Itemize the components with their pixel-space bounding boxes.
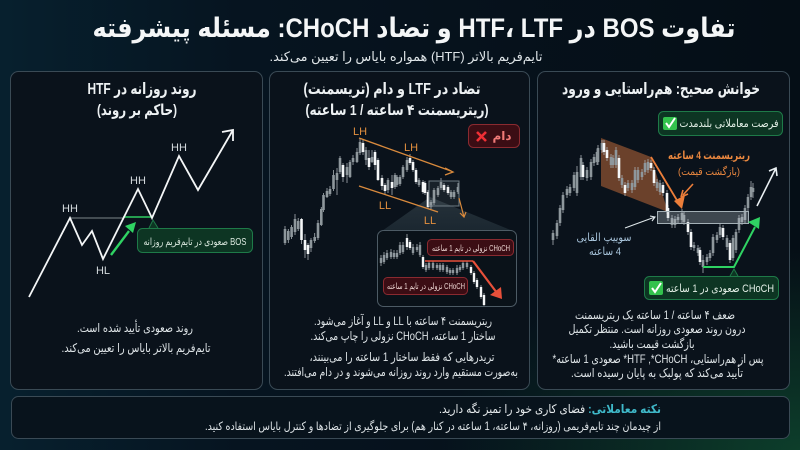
callout: bearish CHoCH lower: CHoCH نزولی در تایم 1 ساعته [387, 281, 465, 292]
panel text: ریتریسمنت ۴ ساعته با LL و LL و آغاز می‌شود. [314, 313, 492, 329]
chart: candlesticks with LH and LL: LL [379, 200, 391, 212]
panel text: روند صعودی تأیید شده است. [77, 319, 193, 336]
zoom inset: 1 hour chart [378, 230, 516, 306]
chart: zigzag uptrend: HH [171, 142, 187, 154]
panel text: بازگشت قیمت باشید. [610, 337, 694, 352]
arrow: retracement end [651, 157, 685, 209]
panel text: درون روند صعودی روزانه است. منتظر تکمیل [568, 322, 746, 337]
arrow: green breakout [703, 217, 760, 267]
callout: bearish CHoCH top: CHoCH نزولی در تایم 1 ساعته [432, 243, 510, 254]
panel heading [304, 81, 488, 119]
panel text: ضعف ۴ ساعته / 1 ساعته یک ریتریسمنت [575, 308, 735, 323]
chart: zigzag uptrend: HH [62, 203, 78, 215]
chart: candlesticks with LH and LL: LH [404, 142, 418, 154]
arrow: green up [111, 222, 136, 255]
callout: trap: دام [492, 129, 512, 144]
panel heading: روند روزانه در HTF [87, 81, 196, 98]
panel text [284, 313, 518, 380]
panel text [62, 319, 210, 356]
arrow: white up [757, 168, 777, 206]
panel: LTF conflict and trap [270, 72, 530, 390]
chart: zigzag uptrend [29, 130, 233, 297]
tip line one: نکته معاملاتی: فضای کاری خود را تمیز نگه دارید. [439, 402, 661, 417]
arrow: orange pointer [681, 184, 693, 197]
zoom cone [382, 197, 513, 231]
panel text: تایم‌فریم بالاتر بایاس را تعیین می‌کند. [62, 341, 210, 356]
panel text: پس از هم‌راستایی، HTF ,*CHoCH* صعودی 1 ساعته* [552, 352, 764, 367]
callout: daily BOS [138, 220, 252, 252]
label: retracement [668, 150, 750, 178]
panel: daily trend in HTF [10, 72, 262, 390]
chart: candlesticks with LH and LL: LL [424, 215, 436, 227]
callout: bullish CHoCH 1h [644, 269, 778, 300]
callout: daily BOS: BOS صعودی در تایم‌فریم روزانه [144, 237, 247, 248]
chart: candlesticks with LH and LL [285, 126, 466, 260]
panel heading [87, 81, 196, 119]
callout: bullish CHoCH 1h: CHoCH صعودی در 1 ساعته [666, 283, 774, 295]
panel text: تریدرهایی که فقط ساختار 1 ساعته را می‌بینند، [310, 350, 494, 365]
panel heading: (ریتریسمنت ۴ ساعته / 1 ساعته) [305, 102, 488, 119]
panel: correct reading [538, 72, 790, 390]
label: sweep: سوییپ القایی [576, 232, 632, 244]
chart: zigzag uptrend: HL [96, 265, 110, 277]
panel text: ساختار 1 ساعته، CHoCH نزولی را چاپ می‌کند. [310, 329, 496, 344]
badge: long term opportunity [658, 112, 782, 136]
label: sweep [576, 232, 632, 258]
label: retracement: (بازگشت قیمت) [678, 165, 740, 178]
panel text: به‌صورت مستقیم وارد روند روزانه می‌شوند و در دام می‌افتند. [284, 365, 518, 380]
chart: candlesticks with LH and LL: LH [353, 126, 367, 138]
label: retracement: ریتریسمنت 4 ساعته [668, 150, 750, 162]
subtitle: تایم‌فریم بالاتر (HTF) همواره بایاس را تعیین می‌کند. [270, 49, 543, 65]
chart: zigzag uptrend: HH [130, 175, 146, 187]
badge: long term opportunity: فرصت معاملاتی بلندمدت [680, 118, 778, 130]
label: sweep: 4 ساعته [589, 246, 621, 258]
callout: trap [468, 124, 520, 148]
panel text [552, 308, 764, 381]
panel heading: تضاد در LTF و دام (تریسمنت) [304, 81, 480, 98]
panel heading: (حاکم بر روند) [97, 102, 177, 119]
panel text: تأیید می‌کند که پولبک به پایان رسیده است. [571, 364, 743, 381]
title: تفاوت BOS در HTF، LTF و تضاد CHoCH: مسئله پیشرفته [92, 13, 736, 44]
tip line two: از چیدمان چند تایم‌فریمی (روزانه، ۴ ساعته، 1 ساعته در کنار هم) برای جلوگیری از تضادها و کنترل بایاس استفاده کنید. [205, 419, 661, 434]
arrow: sweep pointer [625, 216, 655, 228]
chart: candlesticks with retracement [553, 138, 777, 273]
panel: trading tip [12, 396, 790, 438]
